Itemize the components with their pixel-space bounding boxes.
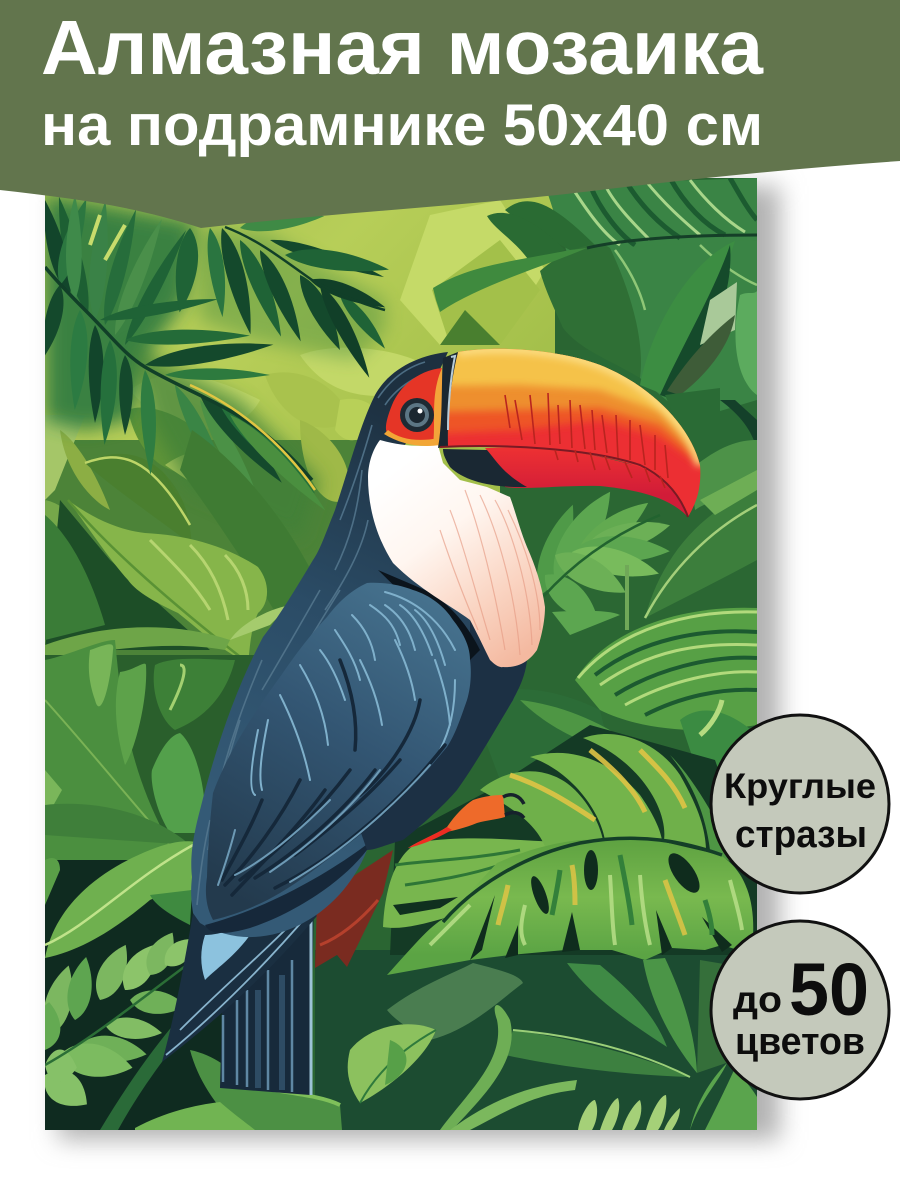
frond A leaflets: [45, 197, 325, 510]
badge: up to 50 colours: [711, 921, 889, 1099]
tail feathers: [162, 913, 316, 1095]
badge: up to 50 colours: 50: [789, 948, 869, 1031]
lower-left leaves and fern: [31, 841, 342, 1130]
undertail red feathers: [315, 850, 393, 968]
bottom foliage: [348, 958, 757, 1130]
badge: round rhinestones: стразы: [735, 814, 867, 856]
face red patch: [386, 368, 442, 443]
beak base band: [438, 352, 458, 448]
frond B leaflets: [171, 207, 391, 381]
lobes above rib: [383, 838, 560, 928]
beak serrations: [505, 393, 668, 488]
mid-left foliage: [45, 430, 325, 860]
jungle painting canvas: [31, 178, 757, 1130]
light background foliage: [45, 200, 544, 539]
dark lower back band: [205, 846, 367, 933]
badge: round rhinestones: Круглые: [724, 767, 876, 806]
lower beak: [485, 447, 688, 517]
wing feather strokes: [218, 592, 455, 895]
neck feather streaks: [197, 362, 435, 905]
top-right banana leaves: [433, 178, 757, 510]
subtitle: на подрамнике 50х40 см: [41, 93, 763, 158]
badge: round rhinestones: [711, 715, 889, 893]
fan leaf, right: [520, 608, 757, 767]
jungle background: [45, 178, 757, 1130]
bib feather strokes: [440, 490, 540, 655]
body neck and back: [191, 352, 527, 937]
badge: up to 50 colours: цветов: [735, 1021, 865, 1063]
right-side fern on dark leaves: [528, 470, 757, 635]
canvas drop shadow: [58, 186, 780, 1140]
foot: [408, 795, 524, 848]
lower beak black patch: [443, 449, 527, 487]
dense frond shade: [45, 195, 195, 430]
eye: [400, 398, 434, 432]
top-left palm fronds: [35, 195, 391, 540]
bib white to peach: [368, 440, 545, 667]
toucan: [162, 340, 720, 1095]
title: Алмазная мозаика: [41, 5, 764, 91]
badge: up to 50 colours: до: [733, 979, 782, 1020]
upper beak: [448, 348, 700, 517]
lobes below rib: [387, 838, 753, 975]
wing: [206, 583, 471, 920]
monstera leaf: [383, 725, 757, 975]
belly: [360, 620, 527, 850]
header banner: [0, 0, 900, 228]
